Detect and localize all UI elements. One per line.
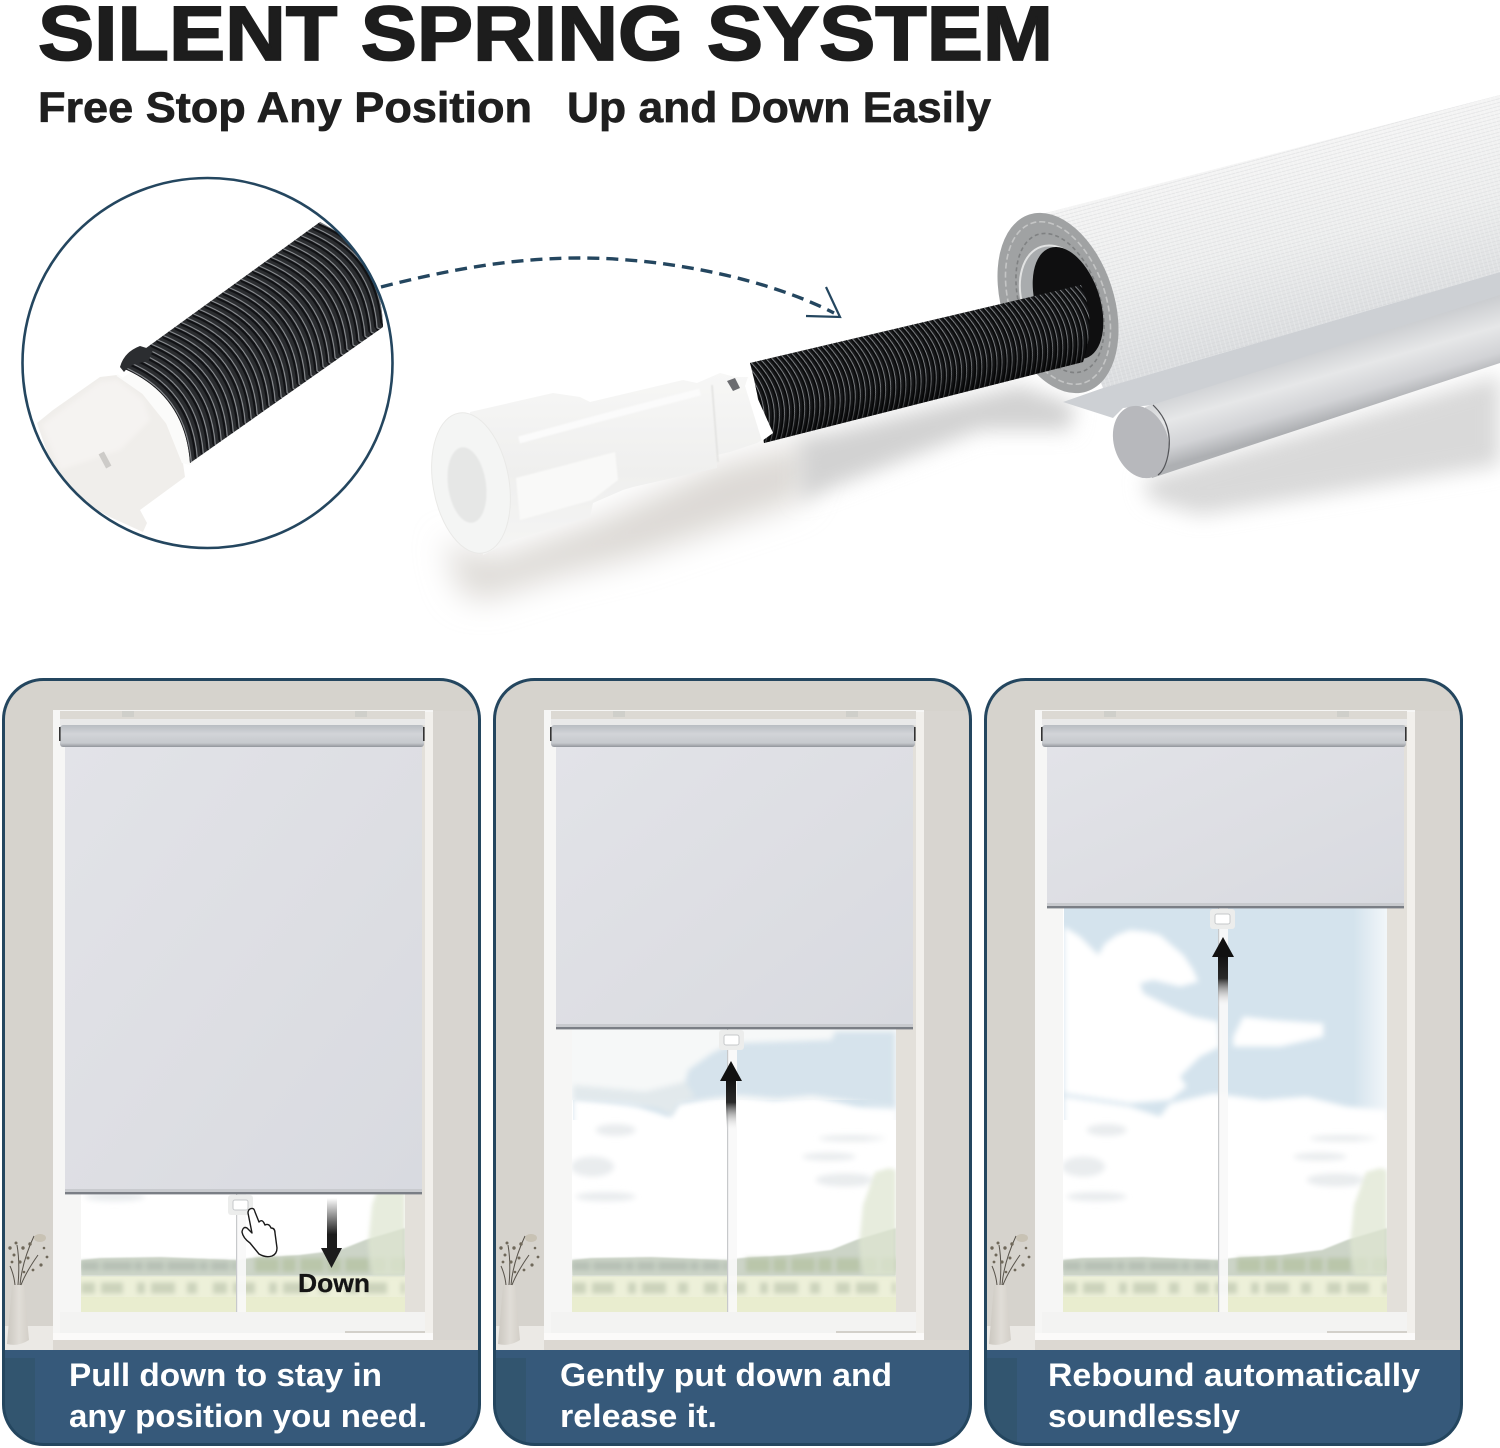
caption — [69, 1357, 427, 1434]
subtitle: Free Stop Any Position — [38, 84, 532, 132]
spring — [750, 285, 1090, 443]
caption: Pull down to stay in — [69, 1357, 382, 1393]
plastic plug — [421, 373, 773, 560]
panel: pull down — [3, 679, 480, 1446]
bottom bar — [1104, 295, 1500, 486]
caption: release it. — [560, 1398, 717, 1434]
arrow: up — [1212, 937, 1234, 1007]
plug cap — [37, 375, 185, 532]
sky behind shade — [572, 1030, 896, 1115]
panel: rebound — [985, 679, 1462, 1446]
pull tab — [228, 1195, 253, 1215]
arrow: down — [321, 1198, 342, 1268]
floor shadows — [445, 375, 1500, 600]
subtitle: Up and Down Easily — [567, 84, 991, 132]
large spring — [120, 222, 383, 463]
icon: hand — [242, 1208, 277, 1257]
label: down: Down — [298, 1268, 370, 1298]
white core — [112, 352, 216, 465]
arrow: up — [720, 1061, 742, 1131]
caption — [1048, 1357, 1420, 1434]
roll of fabric — [976, 95, 1500, 418]
zoom circle: spring detail — [22, 178, 392, 548]
product photo: spring roller — [421, 95, 1500, 600]
caption: soundlessly — [1048, 1398, 1240, 1434]
shade — [65, 747, 422, 1194]
shade — [1047, 747, 1404, 908]
shade — [556, 747, 913, 1029]
pull tab — [719, 1030, 744, 1050]
dashed arrow — [381, 258, 840, 317]
panel: gently release — [494, 679, 971, 1446]
caption: any position you need. — [69, 1398, 427, 1434]
subtitle — [38, 84, 991, 132]
caption: Gently put down and — [560, 1357, 892, 1393]
caption — [560, 1357, 892, 1434]
pull tab — [1210, 909, 1235, 929]
caption: Rebound automatically — [1048, 1357, 1420, 1393]
